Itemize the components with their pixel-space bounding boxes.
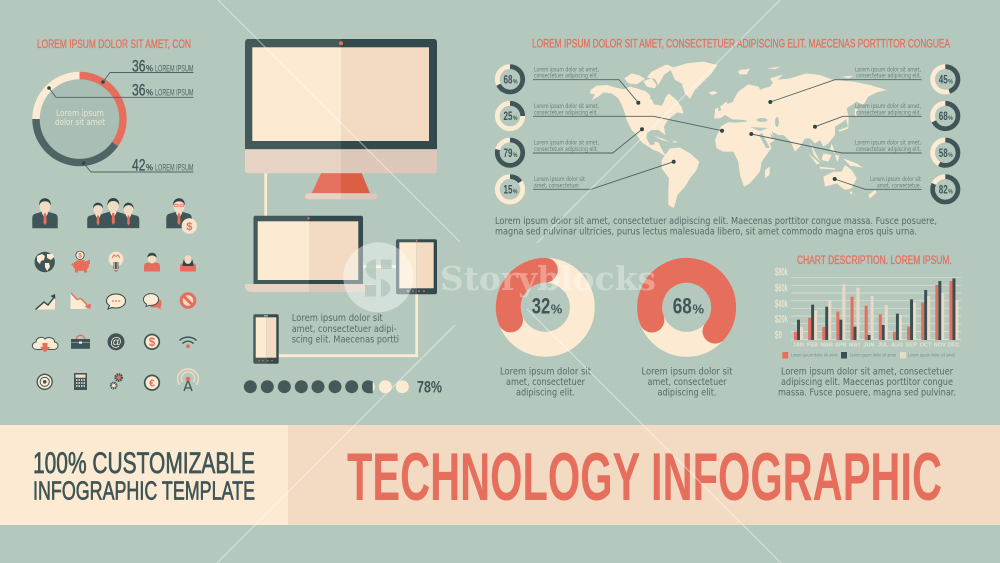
icon: team bbox=[87, 198, 139, 228]
callout: 42 percent: 42 bbox=[132, 157, 146, 175]
caption: 32 percent: adipiscing elit. bbox=[516, 388, 575, 399]
labels and leaders left: Lorem ipsum dolor sit amet, bbox=[534, 141, 599, 147]
labels and leaders left: consectetuer adipiscing elit. bbox=[534, 74, 598, 80]
ring 58 percent: 58 bbox=[939, 148, 948, 160]
icon: chat bubbles bbox=[144, 294, 162, 310]
icon: banker with coin: $ bbox=[186, 221, 192, 233]
callout: 42 percent: % bbox=[146, 163, 153, 173]
device: tablet bbox=[396, 239, 437, 294]
caption: 32 percent: amet, consectetuer bbox=[506, 377, 585, 388]
bar chart: $40k bbox=[775, 298, 788, 310]
text block: devices: amet, consectetuer adipi- bbox=[292, 324, 397, 335]
dot progress meter 78 percent: 78% bbox=[417, 378, 442, 397]
icon: chart falling bbox=[70, 293, 91, 309]
caption: 68 percent: amet, consectetuer bbox=[648, 377, 727, 388]
icon: at sign bbox=[108, 333, 124, 350]
connector lines between devices bbox=[266, 173, 417, 356]
ring 68 percent right: 68 bbox=[939, 111, 948, 123]
text block: devices: Lorem ipsum dolor sit bbox=[292, 313, 383, 324]
panel: icon set bbox=[32, 198, 198, 391]
text block: map description bbox=[495, 216, 937, 238]
ring 79 percent bbox=[497, 140, 523, 165]
icon: banker with coin bbox=[166, 198, 197, 234]
callout: 42 percent bbox=[82, 157, 194, 175]
banner bbox=[0, 425, 1000, 525]
bar chart: JUN bbox=[863, 343, 875, 349]
donut chart 68 percent: % bbox=[692, 301, 704, 316]
bar chart: AUG bbox=[891, 343, 903, 349]
ring 82 percent: % bbox=[948, 190, 953, 196]
text block: chart description: adipiscing elit. Maecenas porttitor congue bbox=[781, 377, 953, 388]
icon: briefcase bbox=[71, 335, 90, 349]
text block: chart description: massa. Fusce posuere, magna sed pulvinar. bbox=[778, 388, 956, 399]
chart legend: Lorem ipsum dolor sit amet bbox=[850, 353, 896, 359]
ring 82 percent: 82 bbox=[939, 184, 948, 196]
icon: wifi bbox=[180, 337, 196, 348]
icon: cloud download bbox=[32, 337, 58, 352]
ring chart: Lorem ipsum bbox=[56, 109, 104, 119]
bar chart: $60k bbox=[775, 283, 788, 295]
banner subtitle bbox=[33, 447, 255, 505]
icon: gears bbox=[111, 374, 122, 388]
bar chart: OCT bbox=[920, 343, 932, 349]
callouts: right data rings bbox=[749, 67, 958, 202]
bar chart: DEC bbox=[948, 343, 960, 349]
donut chart 32 percent bbox=[508, 270, 582, 344]
ring 79 percent: 79 bbox=[504, 148, 512, 160]
icon: target bbox=[37, 374, 52, 389]
bar chart: $80k bbox=[775, 267, 788, 279]
text block: map description: Lorem ipsum dolor sit amet, consectetuer adipiscing elit. Maecenas porttitor congue massa. Fusce posuere, bbox=[495, 216, 937, 227]
chart legend: Lorem ipsum dolor sit amet bbox=[791, 353, 838, 359]
icon: calculator bbox=[74, 373, 87, 390]
text block: chart description bbox=[778, 366, 956, 399]
bar chart: $0 bbox=[775, 329, 782, 341]
donut chart 68 percent bbox=[650, 270, 724, 344]
labels and leaders right: Lorem ipsum dolor sit bbox=[870, 177, 922, 183]
icon: dollar coin bbox=[145, 334, 159, 349]
ring 25 percent bbox=[497, 103, 523, 129]
labels and leaders left: Lorem ipsum dolor sit bbox=[534, 177, 586, 183]
icon: businessman bbox=[32, 198, 58, 228]
icon: antenna bbox=[178, 369, 198, 391]
chart legend: Lorem ipsum dolor sit amet bbox=[908, 353, 955, 359]
labels and leaders right bbox=[749, 67, 922, 189]
callouts: left data rings bbox=[497, 67, 724, 202]
ring chart: dolor sit amet bbox=[55, 118, 106, 128]
caption: 68 percent bbox=[642, 366, 733, 399]
donut chart 68 percent: 68 bbox=[673, 293, 692, 318]
device: smartphone bbox=[253, 314, 279, 364]
labels and leaders right: Lorem ipsum dolor sit amet, bbox=[855, 67, 921, 73]
donut chart 32 percent: % bbox=[551, 301, 563, 316]
device: desktop monitor bbox=[245, 39, 437, 199]
callout: 36 percent second: LOREM IPSUM bbox=[155, 88, 194, 98]
labels and leaders right: Lorem ipsum dolor sit amet, bbox=[855, 104, 921, 110]
icon: piggy bank: $ bbox=[78, 254, 82, 260]
icon: euro coin bbox=[145, 375, 159, 390]
text block: devices: scing elit. Maecenas portti bbox=[292, 335, 399, 346]
ring 15 percent bbox=[497, 177, 523, 202]
bar chart: JAN bbox=[793, 343, 804, 349]
caption: 32 percent: Lorem ipsum dolor sit bbox=[500, 366, 591, 377]
labels and leaders left: amet, consectetuer. bbox=[534, 183, 580, 189]
bar chart: NOV bbox=[934, 343, 946, 349]
labels and leaders left: Lorem ipsum dolor sit amet, bbox=[534, 104, 599, 110]
icon: speech bubble bbox=[106, 294, 126, 309]
text block: devices bbox=[292, 313, 399, 346]
callout: 42 percent: LOREM IPSUM bbox=[155, 163, 194, 173]
bar chart: $20k bbox=[775, 313, 788, 325]
labels and leaders left: consectetuer adipiscing elit. bbox=[534, 147, 598, 153]
icon: globe bbox=[34, 252, 55, 272]
ring 79 percent: % bbox=[513, 153, 518, 159]
ring 25 percent: 25 bbox=[504, 111, 513, 123]
callout: 36 percent first: 36 bbox=[132, 58, 146, 76]
text block: map description: magna sed pulvinar ultricies, purus lectus malesuada libero, sit amet commodo magna eros quis urna. bbox=[495, 227, 917, 238]
caption: 32 percent bbox=[500, 366, 591, 399]
labels and leaders right: consectetuer adipiscing elit. bbox=[856, 74, 921, 80]
watermark: Storyblocks bbox=[440, 259, 656, 298]
ring chart bbox=[36, 76, 123, 163]
icon: chart rising bbox=[36, 294, 55, 310]
labels and leaders left: consectetuer adipiscing elit. bbox=[534, 110, 598, 116]
ring 68 percent left: % bbox=[513, 80, 518, 86]
bar chart bbox=[775, 267, 961, 349]
icon: euro coin: € bbox=[149, 378, 155, 390]
ring 45 percent: 45 bbox=[939, 74, 948, 86]
labels and leaders right: consectetuer adipiscing elit. bbox=[856, 147, 921, 153]
icon: dollar coin: $ bbox=[149, 337, 156, 349]
chart legend bbox=[782, 352, 955, 359]
ring 45 percent: % bbox=[948, 80, 953, 86]
callout: 36 percent second: % bbox=[146, 88, 153, 98]
bar chart: FEB bbox=[807, 343, 818, 349]
device: laptop bbox=[245, 216, 373, 292]
ring 58 percent bbox=[933, 140, 958, 165]
heading: ring chart: LOREM IPSUM DOLOR SIT AMET, CON bbox=[37, 37, 191, 51]
bar chart: SEP bbox=[906, 343, 917, 349]
icon: piggy bank bbox=[71, 251, 90, 272]
labels and leaders left bbox=[533, 67, 724, 189]
ring 68 percent right bbox=[933, 103, 958, 129]
callout: 36 percent second bbox=[47, 82, 194, 100]
ring 15 percent: 15 bbox=[504, 184, 513, 196]
ring 45 percent bbox=[933, 67, 958, 92]
ring 68 percent left: 68 bbox=[504, 74, 513, 86]
icon: woman bbox=[180, 255, 196, 272]
caption: 68 percent: adipiscing elit. bbox=[658, 388, 716, 399]
ring 58 percent: % bbox=[948, 153, 953, 159]
ring 15 percent: % bbox=[513, 190, 518, 196]
callout: 36 percent first: LOREM IPSUM bbox=[155, 64, 194, 74]
callout: 36 percent first: % bbox=[146, 64, 153, 74]
labels and leaders right: Lorem ipsum dolor sit amet, bbox=[855, 141, 921, 147]
caption: 68 percent: Lorem ipsum dolor sit bbox=[642, 366, 733, 377]
watermark bbox=[217, 0, 781, 563]
bar chart: MAY bbox=[849, 343, 861, 349]
donut chart 32 percent: 32 bbox=[532, 293, 550, 318]
bar chart: JUL bbox=[878, 343, 889, 349]
ring 68 percent right: % bbox=[948, 116, 953, 122]
icon: prohibited sign bbox=[181, 294, 195, 307]
banner subtitle: 100% CUSTOMIZABLE bbox=[33, 447, 255, 480]
icon: light bulb bbox=[109, 252, 123, 272]
icon: at sign: @ bbox=[110, 337, 122, 349]
world map bbox=[590, 62, 887, 208]
callout: 36 percent second: 36 bbox=[132, 82, 146, 100]
text block: chart description: Lorem ipsum dolor sit amet, consectetuer bbox=[781, 366, 953, 377]
callout: 36 percent first bbox=[101, 58, 194, 84]
ring 68 percent left bbox=[497, 67, 523, 92]
dot progress meter 78 percent bbox=[244, 378, 442, 397]
labels and leaders left: Lorem ipsum dolor sit amet, bbox=[534, 67, 599, 73]
ring 25 percent: % bbox=[513, 116, 518, 122]
inland seas bbox=[650, 96, 779, 148]
icon: man bbox=[144, 253, 160, 272]
ring 82 percent bbox=[933, 177, 958, 202]
banner subtitle: INFOGRAPHIC TEMPLATE bbox=[33, 477, 255, 505]
bar chart: MAR bbox=[820, 343, 833, 349]
panel: ring chart bbox=[36, 37, 194, 175]
labels and leaders right: amet, consectetue. bbox=[877, 183, 921, 189]
labels and leaders right: consectetuer adipiscing elit. bbox=[856, 110, 921, 116]
bar chart: APR bbox=[835, 343, 847, 349]
